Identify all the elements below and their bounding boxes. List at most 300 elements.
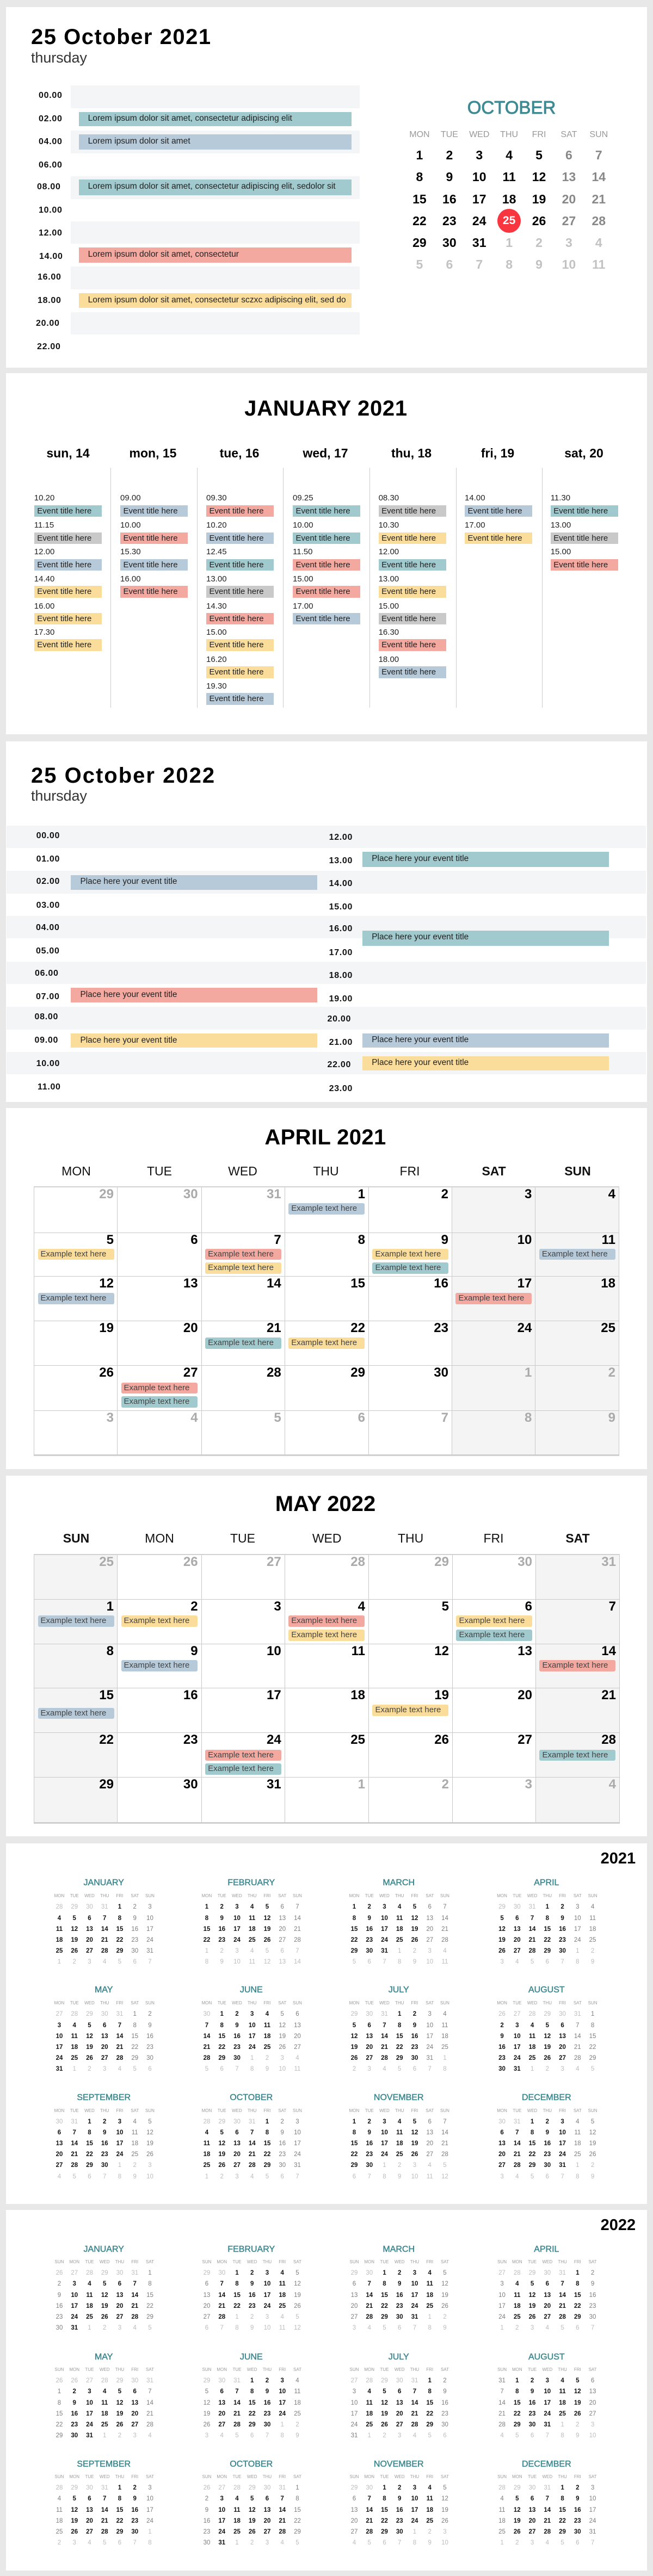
mini calendar: February: 5 [266,1904,269,1910]
calendar grid: May: 25 [99,1555,114,1569]
mini calendar: March: 6 [353,2281,356,2287]
mini calendar: January: 22 [146,2303,153,2309]
time label: 16.00 [329,924,353,933]
mini calendar: March: 3 [413,2270,416,2276]
mini calendar: March: THU [395,1893,404,1898]
mini calendar: July: 31 [426,2055,433,2061]
mini calendar: April: MON [497,1893,507,1898]
calendar grid: April: 29 [99,1187,114,1202]
mini calendar: January: 28 [56,1904,63,1910]
mini calendar: August: 14 [498,2400,506,2406]
mini calendar: February: 15 [233,2292,241,2299]
month calendar: October: 27 [562,214,576,228]
mini calendar: July: TUE [380,2367,389,2371]
mini calendar: April: 7 [560,2281,564,2287]
mini calendar: March: 14 [366,2292,373,2299]
mini calendar: October: 4 [250,2174,254,2180]
mini calendar: February: 22 [204,1937,210,1943]
mini calendar: October: 31 [279,2485,286,2491]
event [551,547,618,571]
mini calendar: November: 10 [411,2174,418,2180]
month calendar: October: 1 [416,148,423,162]
mini calendar: September: 15 [86,2140,93,2147]
mini calendar: May: 24 [86,2422,93,2428]
mini calendar: April: 30 [514,1904,521,1910]
mini calendar: October: 11 [233,2507,241,2513]
time label: 18.00 [329,971,353,980]
mini calendar: August: 30 [498,2066,506,2072]
mini calendar: December [495,2090,600,2182]
mini calendar: June: 20 [218,2411,225,2417]
mini calendar: March: 11 [441,1959,448,1965]
month calendar: October: 6 [446,257,453,271]
mini calendar: March: 30 [366,2270,373,2276]
mini calendar: September: 28 [56,2485,63,2491]
mini calendar: July: 2 [413,2011,416,2017]
mini calendar: July: 2 [443,2377,447,2384]
time label: 18.00 [38,296,61,305]
mini calendar: July: 30 [366,2011,373,2017]
mini calendar: August: FRI [574,2367,581,2371]
event: 14.00 [465,493,485,503]
mini calendar: September: 17 [116,2140,123,2147]
mini calendar: August: 29 [514,2422,521,2428]
month calendar: October: 8 [506,257,513,271]
mini calendar: June: 23 [264,2411,270,2417]
mini calendar: August: 19 [574,2400,581,2406]
mini calendar: July: 3 [428,2011,432,2017]
event bar [79,179,352,195]
mini calendar: April: 15 [544,1926,551,1933]
mini calendar: January: 31 [71,2325,78,2331]
event bar: Place here your event title [81,990,177,999]
calendar grid: May: 9 [190,1644,198,1658]
mini calendar: May: 21 [116,2044,123,2051]
mini calendar: December: 12 [514,2507,521,2513]
weekday heading: THU [313,1164,339,1178]
mini calendar: April: 2 [591,2270,594,2276]
event [206,521,274,544]
mini calendar: June: 9 [266,2066,269,2072]
mini calendar: August: 1 [591,2011,594,2017]
mini calendar: July: 19 [381,2411,388,2417]
mini calendar: September: 3 [148,2485,152,2491]
mini calendar: July: 28 [366,2377,373,2384]
mini calendar: December: 18 [498,2518,506,2524]
mini calendar: March: 17 [411,2292,418,2299]
mini calendar: August: THU [543,2001,552,2005]
calendar grid: April: 8 [525,1410,532,1425]
mini calendar: July: 30 [396,2377,403,2384]
mini calendar: September: 12 [71,2507,78,2513]
mini calendar: June: 30 [218,2377,225,2384]
mini calendar: September: 11 [56,2507,63,2513]
mini calendar: February: 2 [220,1948,224,1954]
mini calendar: November: THU [395,2108,404,2113]
mini calendar: March: MON [349,1893,359,1898]
mini calendar: October: 5 [250,2496,254,2502]
calendar grid: May: 8 [107,1644,114,1658]
event bar [71,988,317,1002]
calendar grid: April: 15 [350,1276,365,1291]
mini calendar: November: 30 [396,2529,403,2535]
mini calendar: March: 29 [381,2314,388,2320]
mini calendar: December: FRI [559,2108,566,2113]
mini calendar: September: 2 [133,2162,137,2169]
mini calendar: February: 12 [264,1915,270,1922]
mini calendar: November [347,2090,452,2182]
mini calendar: March: 8 [428,2325,432,2331]
mini calendar: September: 18 [131,2140,138,2147]
mini calendar: February: 1 [235,2270,239,2276]
mini calendar: December: 22 [529,2151,535,2158]
mini calendar: August: 21 [498,2411,506,2417]
mini calendar: June [199,1982,305,2075]
mini calendar: July: SAT [441,2367,449,2371]
event chip: Example text here [459,1616,525,1625]
mini calendar: April [497,1878,597,1965]
mini calendar: February: 7 [295,1948,299,1954]
mini calendar: May: 16 [146,2033,153,2040]
calendar grid: April: 11 [602,1233,615,1247]
mini calendar: December: 2 [515,2540,519,2546]
mini calendar: July: 29 [426,2422,433,2428]
mini calendar: May: 13 [131,2400,138,2406]
event: 15.00 [206,628,227,637]
mini calendar: June: 8 [250,2066,254,2072]
event: 10.30 [379,521,399,530]
mini calendar: July: 14 [381,2033,388,2040]
month calendar: October: 5 [535,148,543,162]
mini calendar: November: 2 [428,2529,432,2535]
mini calendar: August: 24 [514,2055,521,2061]
mini calendar: June: 3 [250,2011,254,2017]
mini calendar: February: 4 [281,2314,284,2320]
mini calendar: December: SAT [589,2474,597,2479]
mini calendar: July: 8 [398,2022,401,2029]
mini calendar: June: 18 [264,2033,270,2040]
mini calendar: April: 19 [529,2303,535,2309]
calendar grid: May [34,1554,620,1824]
mini calendar: September: 20 [86,2518,93,2524]
mini calendar: August: 1 [515,2377,519,2384]
mini calendar: April: 27 [544,2314,551,2320]
mini calendar: July [347,2351,452,2441]
mini calendar: March: 5 [383,2325,386,2331]
event: 09.00 [120,493,141,503]
mini calendar: December: 4 [546,2540,549,2546]
event [293,521,360,544]
mini calendar: May: 8 [133,2022,137,2029]
mini calendar: October: 10 [294,2129,301,2136]
event: Event title here [553,560,608,569]
time label: 10.00 [39,206,63,215]
mini calendar: April: WED [542,2259,552,2264]
month calendar: October: 29 [412,236,427,250]
mini calendar: December: 12 [589,2129,596,2136]
mini calendar: November: 3 [383,2119,386,2125]
calendar grid: April: 24 [518,1321,532,1335]
mini calendar: January: 13 [86,1926,93,1933]
time label: 10.00 [36,1059,60,1068]
mini calendar: March: 29 [351,1948,358,1954]
mini calendar: April: THU [543,1893,552,1898]
mini calendar: December: MON [512,2474,522,2479]
mini calendar: February: SUN [202,2259,211,2264]
mini calendar: May: 19 [86,2044,93,2051]
mini calendar: February: 13 [204,2292,210,2299]
mini calendar: May: 1 [133,2011,137,2017]
mini calendar: October [199,2458,305,2548]
mini calendar: July: 29 [381,2377,388,2384]
mini calendar: December: 28 [514,2162,521,2169]
event chip: Example text here [40,1616,106,1625]
mini calendar: December: 10 [589,2496,596,2502]
mini calendar: May: 2 [148,2011,152,2017]
mini calendar: December: 24 [589,2518,596,2524]
mini calendar: January: 7 [133,2281,137,2287]
mini calendar: April: THU [558,2259,567,2264]
mini calendar: October: 29 [294,2529,301,2535]
calendar grid: April: 5 [274,1410,281,1425]
mini calendar: September: 5 [73,2174,76,2180]
mini calendar: March: 7 [383,1959,386,1965]
mini calendar: July: 6 [413,2066,416,2072]
mini calendar: February: FEBRUARY [227,2245,275,2254]
mini calendar: June: 23 [233,2044,241,2051]
mini calendar: December: 11 [574,2129,581,2136]
mini calendar: August: 22 [589,2044,596,2051]
mini calendar: October: 5 [266,2174,269,2180]
mini calendar: August: 18 [529,2044,535,2051]
mini calendar: October: 31 [249,2119,256,2125]
title: month: JANUARY 2021 [244,397,408,420]
mini calendar: September: 29 [116,2529,123,2535]
month calendar: October: 13 [562,170,576,184]
event [34,628,102,651]
mini calendar: January: 3 [148,1904,152,1910]
weekday heading: SUN [564,1164,591,1178]
month calendar: October: 4 [595,236,602,250]
mini calendar: April: 24 [498,2314,506,2320]
month calendar: October: 10 [562,257,576,271]
mini calendar: September: 30 [56,2119,63,2125]
event: 16.00 [120,574,141,584]
mini calendar: February: 7 [295,1904,299,1910]
mini calendar: August: 31 [514,2066,521,2072]
event: 17.00 [293,602,313,610]
mini calendar: January [52,2243,157,2333]
mini calendar: June: 4 [220,2432,224,2439]
mini calendar: June: 22 [249,2411,256,2417]
mini calendar: December: 20 [529,2518,535,2524]
mini calendar: June: 22 [218,2044,225,2051]
mini calendar: September: SAT [131,2108,139,2113]
mini calendar: September: 3 [73,2540,76,2546]
mini calendar: June: SAT [278,2001,286,2005]
event: Event title here [381,506,436,516]
mini calendar: April: 30 [589,2314,596,2320]
mini calendar: September: MON [69,2474,79,2479]
event: Event title here [381,640,436,649]
mini calendar: December: 27 [498,2162,506,2169]
month calendar: October: SAT [560,130,577,139]
mini calendar: September [52,2090,157,2182]
mini calendar: May: 27 [86,2377,93,2384]
mini calendar: August [495,1982,600,2075]
event [551,493,618,517]
mini calendar: July: 3 [368,2066,371,2072]
mini calendar: September: 23 [101,2151,108,2158]
mini calendar: January: 2 [133,1904,137,1910]
event chip: Example text here [375,1249,441,1259]
mini calendar: April: 29 [529,2270,535,2276]
mini calendar: February: 2 [250,2314,254,2320]
mini calendar: November: 9 [398,2496,401,2502]
mini calendar: June: FRI [264,2001,270,2005]
mini calendar: September: SEPTEMBER [77,2093,131,2102]
mini calendar: October: 18 [204,2151,210,2158]
mini calendar: November: 28 [366,2529,373,2535]
mini calendar: February: 23 [249,2303,256,2309]
mini calendar: January: 23 [56,2314,63,2320]
mini calendar: November: SUN [440,2108,449,2113]
mini calendar: May: SAT [146,2367,154,2371]
mini calendar: August: 18 [559,2400,566,2406]
mini calendar: February: 6 [205,2325,208,2331]
mini calendar: December: 30 [574,2529,581,2535]
mini calendar: September: 4 [88,2540,91,2546]
mini calendar: April: 31 [529,1904,535,1910]
event chip: Example text here [124,1616,189,1625]
mini calendar: April: 14 [559,2292,566,2299]
mini calendar: August: 5 [515,2432,519,2439]
panel: weekly agenda January 2021 [6,373,647,734]
mini calendar: October: TUE [232,2474,241,2479]
calendar grid: April: 12 [99,1276,114,1291]
weekday heading: MON [145,1531,174,1545]
mini calendar: April: 21 [559,2303,566,2309]
mini calendar: September: 1 [118,2162,121,2169]
mini calendar: May: 29 [131,2055,138,2061]
mini calendar: March: 25 [396,1937,403,1943]
time label: 01.00 [36,854,60,864]
mini calendar: September: 8 [118,2496,121,2502]
mini calendar: February: SAT [293,2259,301,2264]
event: Event title here [123,560,178,569]
mini calendar: October: 20 [233,2151,241,2158]
mini calendar: July: 6 [368,2022,371,2029]
time label: 03.00 [36,901,60,910]
mini calendar: August: 8 [560,2432,564,2439]
mini calendar: May: 11 [71,2033,78,2040]
mini calendar: March: 1 [398,1948,401,1954]
mini calendar: April: MON [512,2259,522,2264]
mini calendar: August: 3 [546,2377,549,2384]
mini calendar: October: 10 [218,2507,225,2513]
event [293,547,360,571]
mini calendar: February: 16 [218,1926,225,1933]
mini calendar: September: 16 [131,2507,138,2513]
mini calendar: June: 30 [233,2055,241,2061]
mini calendar: September: 30 [131,2529,138,2535]
time label: 11.00 [38,1082,61,1092]
mini calendar: November: 12 [441,2496,448,2502]
mini calendar: September: 26 [71,2529,78,2535]
mini calendar: February: 9 [220,1959,224,1965]
mini calendar: August: 28 [529,2011,535,2017]
mini calendar: October: SAT [293,2474,301,2479]
panel: daily schedule 2021 [6,7,647,368]
mini calendar: June: SUN [202,2367,211,2371]
mini calendar: January: TUE [85,2259,94,2264]
event: Event title here [381,667,436,677]
mini calendar: February: 24 [264,2303,270,2309]
mini calendar: October: 21 [279,2518,286,2524]
mini calendar: June: 29 [204,2377,210,2384]
mini calendar: December: 28 [498,2485,506,2491]
time label: 16.00 [38,272,61,282]
calendar grid: May: 23 [183,1732,198,1747]
time label: 05.00 [36,946,60,955]
mini calendar: September: 10 [146,2496,153,2502]
event: Event title here [296,587,350,596]
time label: 02.00 [36,877,60,886]
mini calendar: July: 4 [383,2066,386,2072]
mini calendar: January: 5 [103,2281,106,2287]
mini calendar: August: SAT [574,2001,582,2005]
month calendar: October: 1 [506,236,513,250]
event: Event title here [553,506,608,516]
mini calendar: August: 15 [589,2033,596,2040]
mini calendar: April: 11 [589,1915,596,1922]
title: month: APRIL 2021 [264,1125,386,1149]
calendar grid: April: 14 [267,1276,281,1291]
mini calendar: June [199,2351,305,2441]
mini calendar: November: 15 [351,2140,358,2147]
mini calendar: July: 21 [381,2044,388,2051]
mini calendar: January: 31 [131,2270,138,2276]
mini calendar: August: 28 [574,2055,581,2061]
mini calendar: March [349,1878,449,1965]
mini calendar: January: 26 [101,2314,108,2320]
mini calendar: November: FRI [426,2474,433,2479]
mini calendar: October: 16 [204,2518,210,2524]
time label: 20.00 [328,1014,351,1024]
calendar grid: May: 29 [434,1555,449,1569]
mini calendar: September: 8 [88,2129,91,2136]
mini calendar: March: 26 [441,2303,448,2309]
mini calendar: April: 17 [574,1926,581,1933]
mini calendar: November [347,2458,452,2548]
mini calendar: July: 17 [351,2411,358,2417]
mini calendar: April: 11 [514,2292,520,2299]
mini calendar: July: 26 [351,2055,358,2061]
mini calendar: August: 16 [529,2400,535,2406]
mini calendar: December: DECEMBER [522,2460,571,2469]
mini calendar: March: 7 [443,1904,447,1910]
mini calendar: May: WED [100,2367,110,2371]
mini calendar: December: 3 [560,2119,564,2125]
mini calendar: February: 18 [249,1926,256,1933]
mini calendar: September: 7 [103,2496,106,2502]
mini calendar: April: 9 [591,2281,594,2287]
mini calendar: May: 25 [71,2055,78,2061]
event [379,547,446,571]
mini calendar: August: SUN [497,2367,507,2371]
calendar grid: April: 2 [441,1187,448,1202]
mini calendar: January: 29 [116,1948,123,1954]
